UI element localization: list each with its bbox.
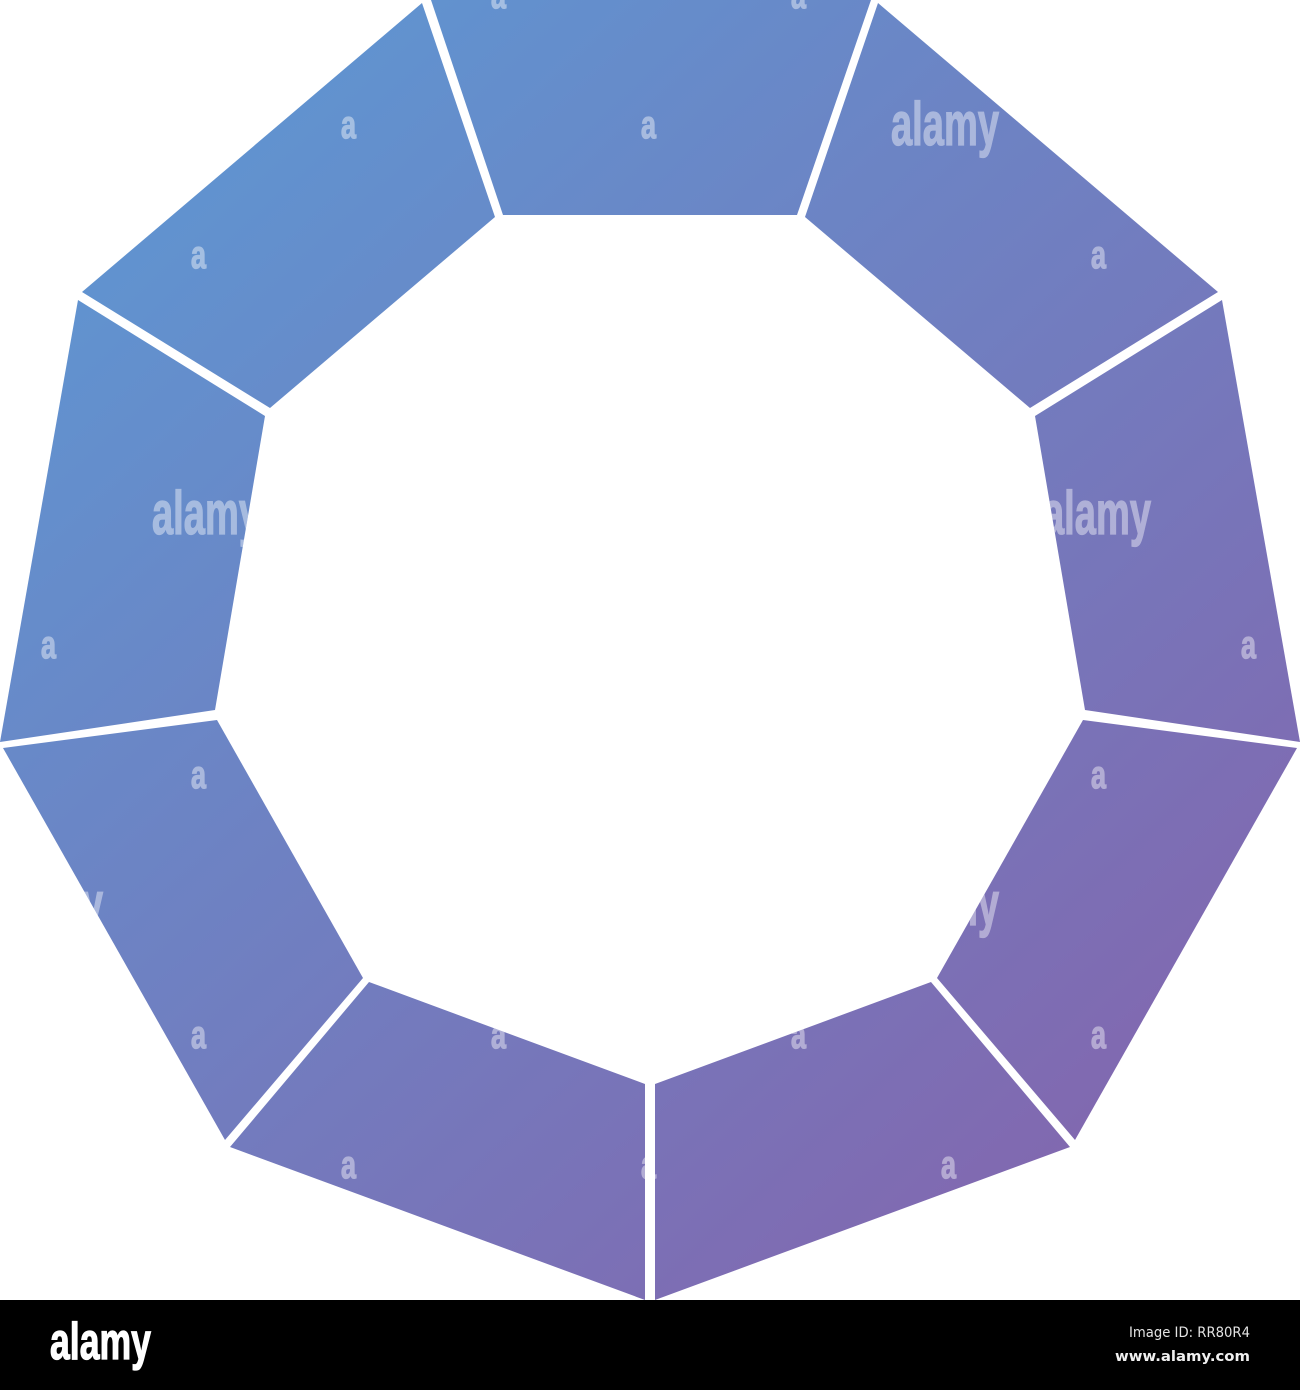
watermarks over ring: a <box>191 754 206 797</box>
segment: bottom right <box>655 982 1070 1300</box>
segment: upper left <box>82 3 495 408</box>
watermarks over ring: a <box>641 1144 656 1187</box>
footer bar <box>0 1300 1300 1390</box>
watermarks over ring: a <box>191 234 206 277</box>
watermarks over ring: a <box>1091 754 1106 797</box>
watermarks over ring: alamy <box>152 479 260 547</box>
website address: www.alamy.com <box>1115 1349 1250 1365</box>
segment: lower right <box>937 720 1297 1140</box>
segment: left <box>0 300 265 742</box>
segment: bottom left <box>230 982 645 1300</box>
segment: lower left <box>3 720 363 1140</box>
watermarks over ring: a <box>1091 1014 1106 1057</box>
watermarks over ring: a <box>941 1144 956 1187</box>
footer logo: alamy <box>50 1313 151 1371</box>
watermarks over ring: alamy <box>0 870 103 938</box>
watermarks over ring: a <box>791 1014 806 1057</box>
watermarks over ring: a <box>491 1014 506 1057</box>
image id: Image ID: RR80R4 <box>1129 1325 1250 1341</box>
segment: upper right <box>805 3 1218 408</box>
watermarks over ring: a <box>341 1144 356 1187</box>
watermarks over ring: alamy <box>1043 479 1151 547</box>
watermarks over ring: alamy <box>891 90 999 158</box>
watermarks over ring: a <box>641 104 656 147</box>
segment: top <box>431 0 871 215</box>
watermarks over ring: alamy <box>891 870 999 938</box>
watermarks over ring: a <box>1241 624 1256 667</box>
watermarks over ring: a <box>1091 234 1106 277</box>
watermarks over ring: a <box>41 624 56 667</box>
segment: right <box>1035 300 1300 742</box>
watermarks over ring: a <box>341 104 356 147</box>
watermarks over ring: a <box>191 1014 206 1057</box>
